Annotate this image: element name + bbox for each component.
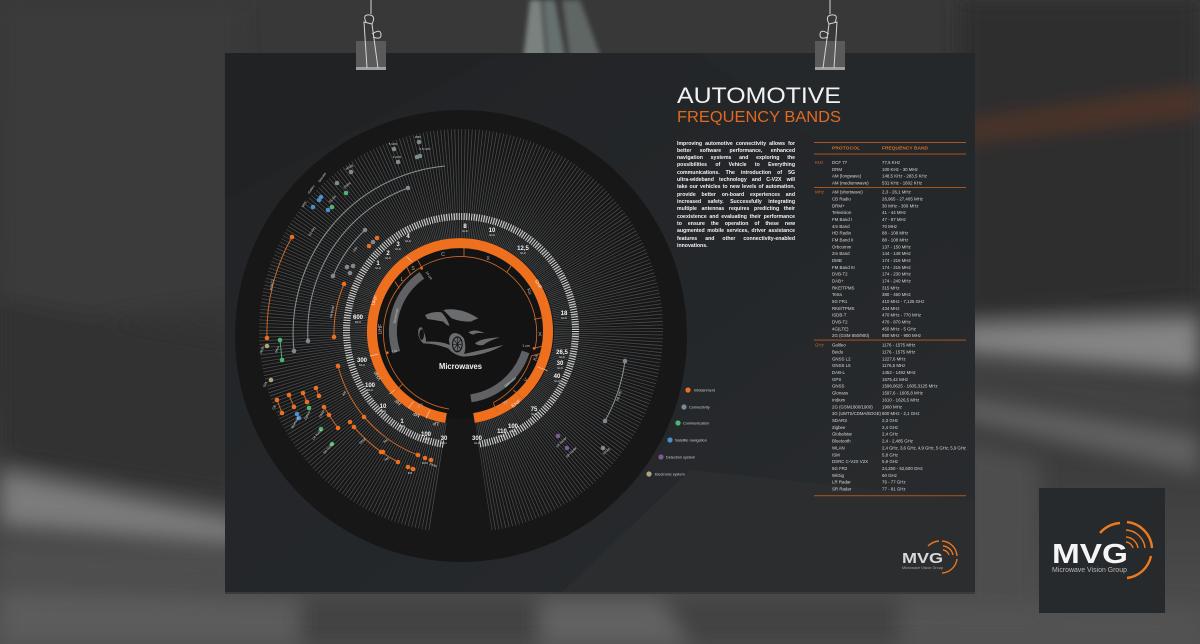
legend: communication: Communication [683,422,709,426]
satellite navigation dots [295,195,330,420]
frequency band column: 24,250 - 52,600 GHz [882,466,923,471]
frequency scale labels: 10 [489,228,496,234]
frequency band column: 77,5 KHz [882,160,900,165]
radar band labels [378,252,542,408]
corner logo box: MVG: Microwave Vision Group [1052,567,1127,574]
section labels: GHz [815,343,824,348]
small protocol labels: 5,9 GHz [419,147,431,151]
frequency scale labels: KHz [441,441,447,445]
radar band labels: C [441,252,445,258]
intro paragraph: increased safety. Successfully integrating [677,199,795,205]
legend [646,387,716,477]
radar band labels: V [523,377,530,384]
frequency scale labels: GHz [520,251,526,255]
binder clip left [356,0,386,70]
protocol column: FM Band III [832,265,855,270]
small protocol labels: 5G FR1 [307,226,317,237]
ring band labels: UHF [370,295,380,307]
frequency scale labels: KHz [423,437,429,441]
frequency scale labels: MHz [380,409,387,413]
heading: Microwaves: Microwaves [439,362,483,371]
frequency scale labels: 1 [376,261,380,267]
frequency scale labels: 4 [406,234,410,240]
frequency scale labels: 3 [396,242,400,248]
protocol column: Galileo [832,343,846,348]
poster logo: MVG: MVG [902,550,943,567]
intro paragraph: coexistence and evaluating their performance [677,214,795,220]
radar band labels: L [401,277,404,283]
small protocol labels: AM [382,438,389,444]
protocol column: AM (mediumwave) [832,181,869,186]
frequency scale labels: 2 [386,251,390,257]
frequency scale labels: 100 [421,432,432,438]
radar band labels: X [486,256,490,262]
protocol column: WiGig [832,473,845,478]
wavelength labels: Millimeter [504,375,518,388]
small protocol labels: Galileo [307,184,316,195]
icon: car silhouette [418,309,503,357]
frequency scale labels: 600 [353,315,364,321]
poster logo: MVG [902,541,957,573]
protocol column: SDARS [832,418,847,423]
frequency scale labels: GHz [405,239,412,243]
protocol column: 4m Band [832,224,850,229]
protocol column: 2G (GSM1800/1900) [832,404,873,409]
frequency band column: 88 - 108 MHz [882,231,908,236]
radar band labels: W [502,399,509,407]
protocol column: DSRC C-V2X V2X [832,459,868,464]
radar band labels: Ku [525,288,533,296]
frequency band column: 434 MHz [882,306,900,311]
frequency scale labels: MHz [359,363,366,367]
section labels: MHz [815,190,824,195]
small protocol labels: Glonass [317,171,327,183]
protocol column: GNSS L5 [832,363,851,368]
wavelength labels: Decimeter [392,307,400,324]
ring band labels: HF [394,397,403,406]
protocol column: DMB [832,258,842,263]
frequency band column: 148,5 KHz - 283,5 KHz [882,174,927,179]
frequency scale labels: GHz [561,316,568,320]
frequency scale labels: 30 [557,361,564,367]
radar band labels: X [538,332,542,338]
wavelength labels [391,270,530,388]
corner logo box: MVG: MVG [1052,538,1128,569]
protocol column: WLAN [832,446,845,450]
protocol column: DAB-L [832,370,845,375]
frequency band column: 531 KHz - 1602 KHz [882,181,922,186]
frequency scale labels: 75 [531,407,538,413]
frequency band column: 5,8 GHz [882,452,898,457]
radar band labels: UHF [378,324,384,334]
protocol column: AM (longwave) [832,174,862,179]
corner logo box: MVG [1039,488,1165,613]
frequency scale labels: MHz [367,388,374,392]
protocol column: Iridium [832,398,846,402]
protocol column: Zigbee [832,425,846,430]
frequency band column: 30 MHz - 300 MHz [882,203,919,208]
intro paragraph: possibilities of Vehicle to Everything [677,162,795,168]
frequency band column: 450 MHz - 5 GHz [882,326,916,331]
protocol column: Glonass [832,391,849,396]
infotainment arcs (orange) [267,237,418,462]
frequency band column: 70 MHz [882,224,897,229]
ring band labels [370,279,543,426]
frequency scale labels: GHz [554,379,560,383]
frequency band column: 380 - 460 MHz [882,292,911,297]
frequency band column: 1176 - 1575 MHz [882,343,915,348]
protocol column: DCF 77 [832,160,848,165]
radar band labels: Ka [532,354,540,361]
legend: electronic system: Electronic system [655,472,685,476]
grey wavelength arc: millimeter [471,352,526,398]
ring band labels: VHF [373,370,383,381]
small protocol labels: LR Radar [311,428,323,441]
intro paragraph: navigation systems and exploring the [677,155,795,161]
frequency band column: 470 - 870 MHz [882,320,911,325]
inner dark circle [373,243,549,419]
frequency band column: 1452 - 1492 MHz [882,370,916,375]
small protocol labels: ISM [352,246,359,253]
small protocol labels: WiFi [415,135,421,139]
ring band labels: EHF [511,399,522,410]
circular frequency chart [235,110,687,562]
frequency scale labels: 26,5 [556,350,568,356]
frequency band column: 174 - 230 MHz [882,272,911,277]
title [677,83,841,126]
table header: FREQUENCY BAND [882,146,929,152]
electronic system dots [265,344,273,382]
radial spoke lines [314,184,608,478]
radar band labels: LF [416,402,423,408]
table header: PROTOCOL [832,146,860,152]
small protocol labels: 5 GHz [389,142,398,146]
legend: infotainment: Infotainment [694,388,716,392]
binder clip right [815,0,845,70]
small protocol labels: Bluetooth [290,416,300,429]
protocol column: SR Radar [832,487,852,492]
intro paragraph: augmented mobile services, driver assistance [677,228,795,234]
frequency band column: 137 - 150 MHz [882,244,911,249]
frequency scale labels: 40 [554,374,561,380]
frequency band column: 2,4 - 2,485 GHz [882,439,913,444]
small protocol labels: FM [408,471,413,475]
frequency band column: 1597,6 - 1605,8 MHz [882,391,923,396]
connectivity dots [292,140,627,450]
protocol column: ISM [832,452,840,457]
frequency band column: 174 - 240 MHz [882,278,911,284]
frequency band column: 77 - 81 GHz [882,487,906,492]
frequency scale labels: 100 [508,424,519,430]
white frequency tick ring [346,216,576,446]
frequency scale labels: 18 [561,311,568,317]
small protocol labels: WiGig [345,163,354,171]
frequency band column: 1575,42 MHz [882,377,908,382]
protocol column: GPS [832,377,841,382]
frequency band column: 2,4 GHz [882,425,898,430]
frequency band column: 2,3 GHz [882,418,898,423]
frequency band column: 47 - 87 MHz [882,217,906,222]
bottom wedge gap [428,420,494,545]
frequency scale labels: GHz [462,229,468,233]
wavelength labels: 10 cm [425,270,433,280]
intro paragraph: Improving automotive connectivity allows for [677,140,795,146]
intro paragraph: multiple antennas requires predicting their [677,206,795,212]
small protocol labels: SR Radar [322,442,334,455]
frequency scale labels: GHz [489,233,496,237]
protocol column: DVB-T2 [832,272,848,277]
frequency band column: 100 KHz - 30 MHz [882,167,918,172]
protocol column: Globalstar [832,432,853,437]
frequency band column: 1598,0625 - 1605,3125 MHz [882,384,938,389]
frequency band column: 1227,6 MHz [882,356,906,361]
intro paragraph: take our vehicles to new levels of automation, [677,184,795,190]
frequency scale labels: 300 [472,436,483,442]
frequency band column: 470 MHz - 770 MHz [882,313,921,318]
frequency scale labels: 1 [400,419,404,425]
protocol column: 5G FR2 [832,466,848,471]
frequency band column: 174 - 216 MHz [882,265,911,270]
small protocol labels: Tetra [274,345,280,354]
protocol column: HD Radio [832,231,852,236]
frequency scale labels: GHz [385,256,392,260]
frequency scale labels: GHz [474,441,480,445]
frequency band column: 410 MHz - 7,125 GHz [882,299,924,304]
frequency band column: 88 - 108 MHz [882,238,908,242]
frequency band column: 1900 MHz [882,404,902,409]
frequency scale labels: GHz [499,434,506,438]
intro paragraph: features and other connectivity-enabled [677,236,795,242]
legend: connectivity: Connectivity [689,406,710,410]
intro paragraph: ultra-wideband technology and C-V2X will [677,177,795,183]
frequency scale labels: 10 [380,404,387,410]
protocol column: RKE/TPMS [832,285,855,290]
protocol column: FM Band II [832,238,853,242]
protocol column: 5G FR1 [832,299,848,304]
frequency scale labels [353,224,568,445]
small protocol labels: AM [384,456,390,462]
protocol column: CB Radio [832,196,851,201]
table header [832,146,929,152]
frequency scale labels: 110 [497,429,507,435]
section labels: KHz [815,160,823,165]
intro paragraph: provide better on-board experiences and [677,192,795,198]
ring band labels: SHF [533,279,543,290]
poster panel [225,53,975,594]
small protocol labels: 4 GHz [393,155,402,159]
frequency band column: 76 - 77 GHz [882,480,906,485]
frequency band column: 41 - 44 MHz [882,210,906,215]
frequency band column: 2,4 GHz [882,432,898,437]
protocol column: Beidu [832,350,844,354]
frequency band column: 2,4 GHz, 3,6 GHz, 4,9 GHz, 5 GHz, 5,9 GHz [882,446,966,450]
infotainment dots [265,235,433,471]
protocol column: AM (shortwave) [832,190,863,195]
intro paragraph: communications. The introduction of 5G [677,170,795,176]
small protocol labels: GPS [301,201,308,208]
frequency band column: 1176,5 MHz [882,363,905,368]
protocol column: DRM+ [832,203,845,208]
small protocol labels: SR Radar [565,446,578,459]
frequency scale labels: 30 [441,436,448,442]
frequency scale labels: GHz [557,366,564,370]
protocol column: 3G (UMTS/CDMA/EDGE) [832,411,882,416]
ring band labels: LF [432,420,439,426]
frequency scale labels: GHz [531,412,538,416]
protocol column: LR Radar [832,480,851,485]
small protocol labels: LR Radar [555,436,567,448]
small protocol labels: Radio [429,462,438,468]
small protocol labels: CB [271,405,277,410]
protocol column: Tetra [832,292,842,297]
ring band labels: MF [412,410,421,418]
frequency scale labels: 8 [463,224,467,230]
small protocol labels: AM [341,390,347,397]
grey wavelength arc: decimeter [393,275,422,352]
small protocol labels: DRM+ [318,409,326,418]
small protocol labels: DAB+ [259,345,265,354]
protocol column: Orbcomm [832,244,852,249]
intro paragraph: better software performance, enhanced [677,148,795,154]
intro paragraph: to ensure the operation of these new [677,221,795,227]
frequency scale labels: 12,5 [517,246,529,252]
protocol column: RKE/TPMS [832,306,855,311]
small protocol labels: FM Band [329,305,335,318]
protocol column: DVB-T2 [832,320,848,325]
section labels [815,160,824,348]
wavelength labels: 1 cm [522,344,530,348]
table rules [814,142,966,496]
small protocol labels: 5G FR2 [615,390,623,401]
frequency scale labels: GHz [510,429,516,433]
frequency scale labels: MHz [355,320,362,324]
frequency band column: 315 MHz [882,285,900,290]
intro paragraph: innovations. [677,243,708,249]
frequency band column: 850 MHz - 900 MHz [882,333,921,338]
frequency band column: 1610 - 1626,5 MHz [882,398,919,402]
protocol column: Bluetooth [832,439,851,444]
poster logo: MVG: Microwave Vision Group [902,566,943,570]
detection system dots [556,434,569,450]
communication dots [278,191,348,446]
frequency band column: 800 MHz - 2,1 GHz [882,411,920,416]
frequency table [814,142,966,496]
small protocol labels: WiGig [602,447,611,456]
small protocol labels [259,135,623,475]
protocol column: GNSS [832,384,845,389]
protocol column: GNSS L2 [832,356,851,361]
frequency scale labels: GHz [375,266,382,270]
small protocol labels: DSRC [343,180,353,190]
title: AUTOMOTIVE [677,83,841,108]
frequency scale labels: GHz [395,247,402,251]
small protocol labels: DCF [422,461,428,465]
frequency scale labels: MHz [399,424,406,428]
connectivity arcs (grey) [293,166,625,421]
protocol column [832,160,882,492]
frequency band column [882,160,966,492]
frequency scale labels: 300 [357,358,368,364]
frequency band column: 26,965 - 27,405 MHz [882,196,923,201]
wavelength labels: 1 m [391,349,397,353]
orange spectrum ring [372,243,548,418]
protocol column: ISDB-T [832,313,847,318]
radar band labels: S [411,266,415,272]
small protocol labels: DVB-T2 [269,279,275,291]
small protocol labels: Zigbee [303,410,311,421]
protocol column: 2G (GSM 850/900) [832,333,870,338]
dark chart disk [235,110,687,562]
protocol column: DRM [832,167,842,172]
frequency scale labels: 100 [365,383,376,389]
protocol column: FM Band I [832,217,852,222]
small protocol labels: ISM [262,381,268,388]
frequency band column: 60 GHz [882,473,897,478]
frequency band column: 5,9 GHz [882,459,898,464]
frequency band column: 1176 - 1575 MHz [882,350,915,354]
protocol column: Television [832,210,852,215]
intro paragraph [677,140,795,249]
protocol column: DAB+ [832,278,844,284]
band dividers and thin orange arcs [370,248,547,418]
protocol column: 4G(LTE) [832,326,849,331]
frequency scale labels: GHz [559,355,566,359]
protocol column: 2m Band [832,251,850,256]
legend: detection system: Detection system [666,456,695,460]
frequency band column: 144 - 148 MHz [882,251,911,256]
small protocol labels: DRM [358,437,367,445]
legend: satellite navigation: Satellite navigation [675,438,707,442]
frequency band column: 2,3 - 26,1 MHz [882,190,911,195]
small protocol labels: WLAN [328,195,337,204]
title: FREQUENCY BANDS [677,109,841,126]
frequency band column: 174 - 216 MHz [882,258,911,263]
